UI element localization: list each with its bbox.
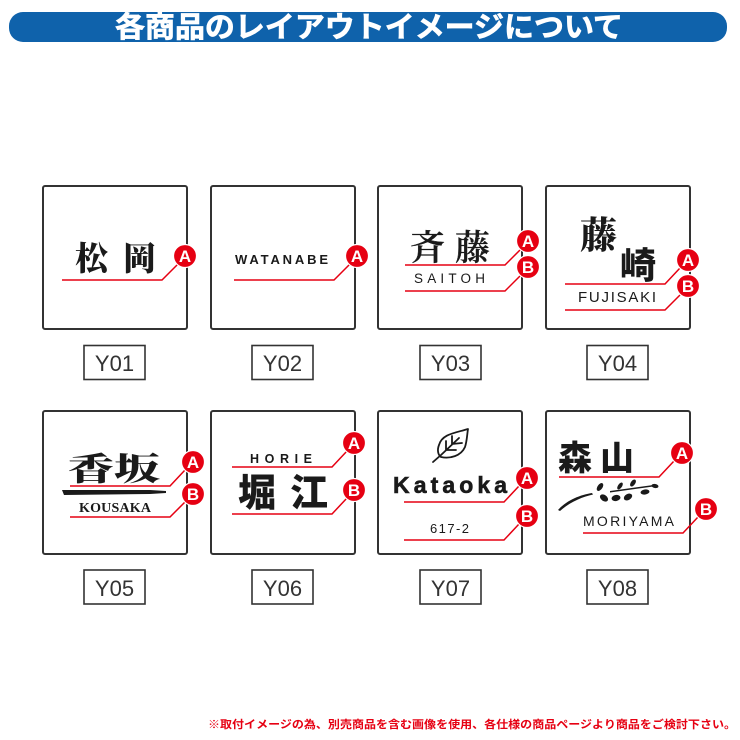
callout A [232, 432, 366, 467]
callout A: A [676, 444, 688, 463]
callout A [565, 248, 700, 284]
footnote: ※取付イメージの為、別売商品を含む画像を使用、各仕様の商品ページより商品をご検討下さい。 [208, 717, 736, 731]
callout A [62, 244, 196, 280]
panel: Y01 [43, 186, 196, 329]
name text: Kataoka: Kataoka [393, 472, 507, 498]
name text: 藤: 藤 [580, 205, 617, 259]
label: Y03: Y03 [431, 351, 470, 376]
name text: WATANABE: WATANABE [235, 252, 328, 267]
callout B [70, 482, 204, 517]
callout B: B [700, 500, 712, 519]
name text: SAITOH: SAITOH [414, 271, 485, 286]
name text: HORIE: HORIE [250, 452, 312, 466]
name text: KOUSAKA: KOUSAKA [79, 501, 152, 516]
label: Y06 [252, 570, 313, 604]
name text: 香坂: 香坂 [68, 444, 160, 490]
title banner: 各商品のレイアウトイメージについて [115, 11, 623, 44]
label: Y06: Y06 [263, 576, 302, 601]
brush stroke [62, 490, 166, 495]
name text: 森山: 森山 [558, 431, 634, 480]
label: Y07 [420, 570, 481, 604]
callout B: B [682, 277, 694, 296]
callout B [405, 256, 540, 291]
panel: Y04 [546, 186, 700, 329]
panel: Y05 [43, 411, 204, 554]
callout A [234, 244, 368, 280]
label: Y07: Y07 [431, 576, 470, 601]
name text: FUJISAKI: FUJISAKI [578, 289, 656, 306]
label: Y02: Y02 [263, 351, 302, 376]
panel: Y03 [378, 186, 540, 329]
title banner [9, 11, 727, 44]
label: Y05 [84, 570, 145, 604]
callout A: A [348, 434, 360, 453]
label: Y02 [252, 346, 313, 380]
label: Y08: Y08 [598, 576, 637, 601]
label: Y04: Y04 [598, 351, 637, 376]
callout A [70, 450, 204, 486]
name text: 堀江: 堀江 [238, 462, 328, 517]
callout B [565, 274, 700, 310]
panel: Y07 [378, 411, 538, 554]
label: Y01 [84, 346, 145, 380]
name text: 崎: 崎 [620, 237, 656, 289]
name text: 松岡: 松岡 [75, 233, 156, 280]
callout A: A [682, 251, 694, 270]
label: Y03 [420, 346, 481, 380]
callout B: B [521, 507, 533, 526]
callout A: A [521, 469, 533, 488]
name text: 617-2: 617-2 [430, 521, 469, 536]
callout A [559, 442, 694, 477]
callout B: B [522, 258, 534, 277]
callout A: A [522, 232, 534, 251]
callout B: B [187, 485, 199, 504]
label: Y01: Y01 [95, 351, 134, 376]
label: Y05: Y05 [95, 576, 134, 601]
icon: leaf [433, 429, 468, 462]
panel: Y02 [211, 186, 368, 329]
label: Y04 [587, 346, 648, 380]
name text: MORIYAMA: MORIYAMA [583, 513, 675, 529]
callout A: A [187, 453, 199, 472]
callout B: B [348, 481, 360, 500]
callout B [583, 498, 718, 533]
callout A: A [179, 247, 191, 266]
panel: Y08 [546, 411, 718, 554]
name text: 斉藤: 斉藤 [410, 221, 490, 271]
callout A [405, 230, 540, 265]
callout B [404, 504, 538, 540]
callout B [232, 478, 366, 514]
label: Y08 [587, 570, 648, 604]
panel: Y06 [211, 411, 366, 554]
callout A: A [351, 247, 363, 266]
callout A [404, 466, 538, 502]
icon: leafy branch [558, 478, 659, 511]
